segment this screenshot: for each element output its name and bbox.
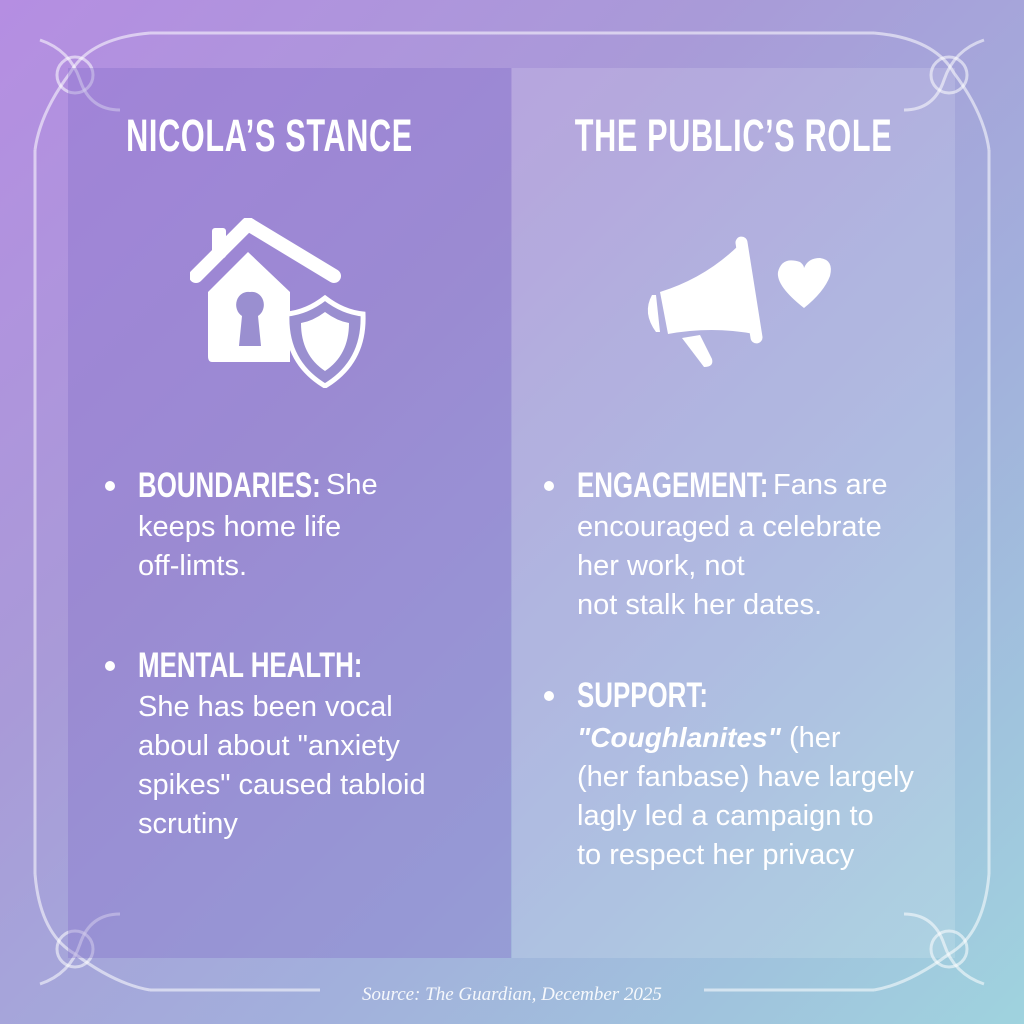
bullet: boundaries: She xyxy=(326,469,378,501)
bullet: support: lagly led a campaign to xyxy=(577,800,874,832)
icon: house with shield xyxy=(190,218,366,388)
heading: NICOLA’S STANCE xyxy=(126,110,413,161)
bullet: boundaries: off-limts. xyxy=(138,550,247,582)
icon: megaphone with heart xyxy=(648,236,831,367)
bullet: support xyxy=(544,676,914,871)
bullet: engagement: her work, not xyxy=(577,550,745,582)
bullet: mental health xyxy=(105,646,426,840)
bullet: engagement: ENGAGEMENT: xyxy=(577,466,768,505)
bullet: boundaries: BOUNDARIES: xyxy=(138,466,321,505)
bullet: mental health: spikes" caused tabloid xyxy=(138,769,426,801)
bullet: support: "Coughlanites" (her xyxy=(577,722,841,754)
bullet: mental health: MENTAL HEALTH: xyxy=(138,646,362,685)
bullet: engagement: Fans are xyxy=(773,469,887,501)
bullet: engagement xyxy=(544,466,887,621)
bullet: support: SUPPORT: xyxy=(577,676,708,715)
bullet: mental health: scrutiny xyxy=(138,808,238,840)
bullet: boundaries xyxy=(105,466,378,582)
bullet: support: (her fanbase) have largely xyxy=(577,761,914,793)
panel: Nicola's stance xyxy=(68,68,511,958)
bullet: engagement: not stalk her dates. xyxy=(577,589,822,621)
bullet: support: to respect her privacy xyxy=(577,839,854,871)
source footer: Source: The Guardian, December 2025 xyxy=(362,984,662,1005)
heading: THE PUBLIC’S ROLE xyxy=(575,110,892,161)
bullet: boundaries: keeps home life xyxy=(138,511,341,543)
bullet: mental health: She has been vocal xyxy=(138,691,393,723)
bullet: mental health: aboul about "anxiety xyxy=(138,730,400,762)
bullet: engagement: encouraged a celebrate xyxy=(577,511,882,543)
panel: public's role xyxy=(512,68,955,958)
